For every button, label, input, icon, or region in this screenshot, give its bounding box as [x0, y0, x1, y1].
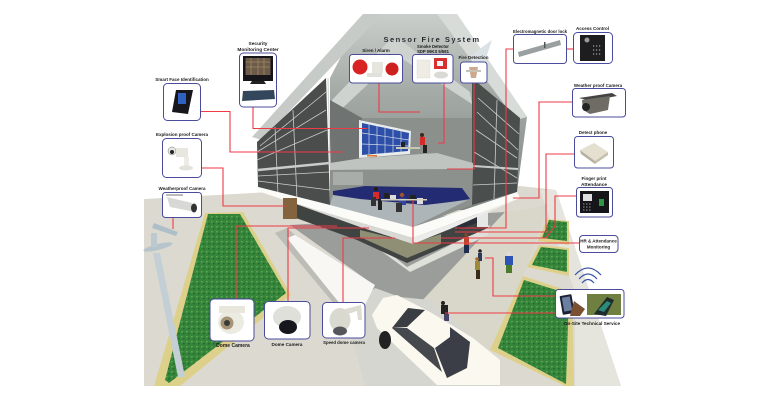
panel: smart face identification: Smart Face Identification	[155, 77, 209, 82]
panel: detect phone: Detect phone	[579, 130, 608, 135]
roof edges	[252, 14, 382, 140]
panel: dome camera one: Dome Camera	[216, 343, 250, 349]
panel: smoke detector: Smoke Detector	[417, 44, 449, 49]
panel: fire detection	[458, 55, 489, 83]
left facade	[257, 78, 330, 205]
building	[252, 14, 527, 272]
paved courtyard	[275, 205, 548, 386]
base platform and wall under slab	[355, 225, 490, 272]
icon: wireless signal	[575, 268, 601, 283]
panel: HR and attendance monitoring: HR & Attendance	[580, 238, 617, 244]
title: Sensor Fire System: Sensor Fire System	[383, 35, 481, 44]
panel: electromagnetic door lock	[513, 29, 568, 64]
panel: HR and attendance monitoring	[580, 236, 618, 252]
panel: access control	[574, 26, 612, 64]
panel: siren / alarm	[350, 48, 402, 83]
garden bed left	[154, 212, 291, 386]
panel: smoke detector: SDP 09KS 5/581	[417, 49, 450, 54]
panel: waterproof camera right	[572, 83, 626, 117]
panel: HR and attendance monitoring: Monitoring	[587, 244, 610, 250]
panel: security monitoring center: Monitoring Center	[237, 47, 279, 53]
upper floor slab	[330, 153, 473, 170]
pedestrians	[441, 233, 513, 321]
panel: waterproof camera left: Weatherproof Camera	[159, 186, 206, 191]
panel: security monitoring center	[237, 41, 279, 107]
panel: dome camera one	[210, 299, 254, 349]
panel: electromagnetic door lock: Electromagnetic door lock	[513, 29, 568, 34]
panel: speed dome camera: Speed dome camera	[323, 340, 366, 345]
street lamp	[143, 223, 185, 377]
garden beds right	[490, 219, 574, 386]
panel: on-site technical service	[556, 290, 624, 326]
panel: explosion proof camera	[156, 132, 208, 178]
panel: fingerprint attendance: Attendance	[581, 182, 607, 188]
panel: smoke detector	[412, 44, 453, 83]
panel: security monitoring center: Security	[249, 41, 268, 47]
panel: detect phone	[574, 130, 614, 168]
panel: fingerprint attendance: Finger print	[582, 176, 607, 181]
panel: siren / alarm: Siren / Alarm	[362, 48, 390, 53]
panel: dome camera two: Dome Camera	[272, 342, 303, 347]
column	[283, 198, 297, 219]
background ground	[144, 186, 621, 386]
panel: speed dome camera	[322, 302, 366, 345]
car	[372, 295, 500, 385]
connector lines	[173, 49, 579, 313]
panel: on-site technical service: On-Site Technical Service	[564, 321, 620, 326]
panel: fire detection: Fire Detection	[458, 55, 489, 60]
panel: explosion proof camera: Explosion proof Camera	[156, 132, 208, 137]
panel: access control: Access Control	[576, 26, 609, 31]
panel: dome camera two	[264, 302, 310, 347]
floor slab white	[258, 187, 520, 238]
panel: smart face identification	[155, 77, 209, 120]
people and desks	[371, 133, 513, 321]
video wall	[359, 120, 411, 158]
panel: waterproof camera right: Weather proof Camera	[574, 83, 623, 88]
panel: fingerprint attendance	[576, 176, 612, 217]
upper room dark wall	[330, 100, 362, 163]
panel: waterproof camera left	[159, 186, 206, 218]
right facade	[472, 83, 520, 205]
lower room	[330, 169, 473, 227]
interior walls	[330, 14, 527, 210]
